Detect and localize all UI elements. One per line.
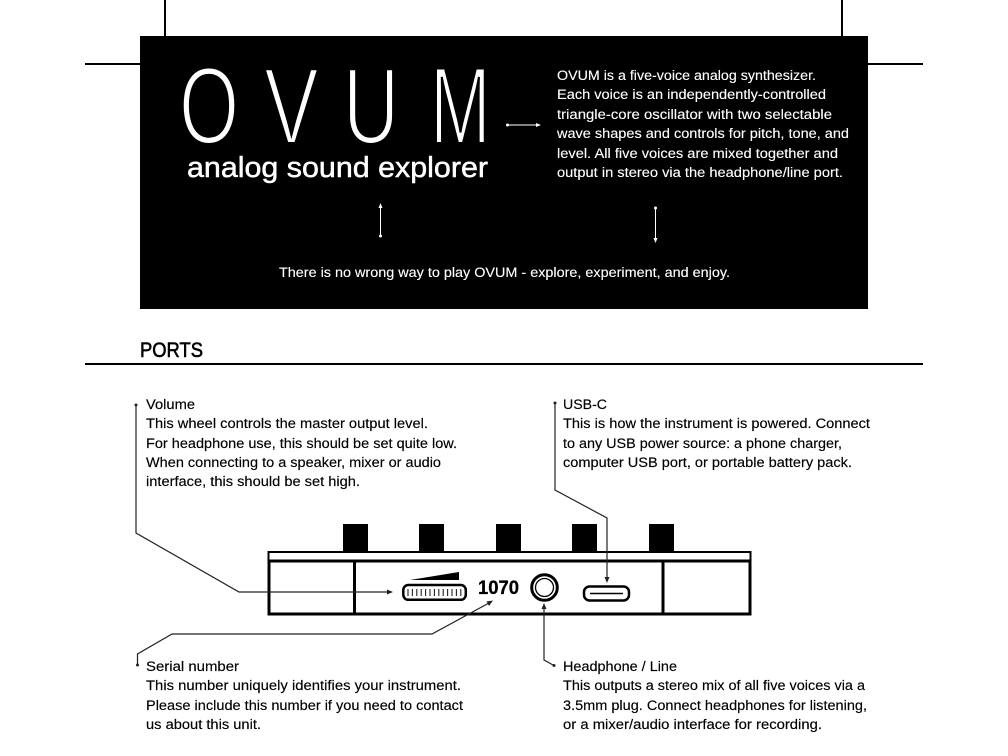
subtitle: analog sound explorer <box>187 152 488 184</box>
panel: intro <box>140 36 868 309</box>
text block: headphone / line <box>563 659 867 732</box>
title: OVUM: O <box>179 45 239 168</box>
text block: headphone / line: or a mixer/audio interface for recording. <box>563 717 822 732</box>
title: OVUM: M <box>430 45 491 167</box>
description text: OVUM is a five-voice analog synthesizer. <box>557 68 816 83</box>
description text: Each voice is an independently-controlled <box>557 87 826 102</box>
arrow: right vertical <box>654 206 658 243</box>
heading: ports: PORTS <box>140 339 203 362</box>
description text: triangle-core oscillator with two selectable <box>557 107 832 122</box>
device body <box>268 552 750 614</box>
text block: usb-c: USB-C <box>563 397 607 412</box>
text block: serial number: Serial number <box>146 659 240 674</box>
text block: headphone / line: 3.5mm plug. Connect headphones for listening, <box>563 698 867 713</box>
text block: volume: interface, this should be set high. <box>146 474 360 489</box>
description text: output in stereo via the headphone/line port. <box>557 165 843 180</box>
text block: headphone / line: Headphone / Line <box>563 659 677 674</box>
text block: volume: This wheel controls the master output level. <box>146 416 428 431</box>
text block: volume: For headphone use, this should be set quite low. <box>146 436 457 451</box>
knobs <box>343 524 674 552</box>
device diagram <box>268 524 750 614</box>
description text: level. All five voices are mixed together and <box>557 146 838 161</box>
title: OVUM <box>179 45 491 168</box>
closing line: There is no wrong way to play OVUM - explore, experiment, and enjoy. <box>279 265 730 280</box>
arrow: serial number <box>136 600 493 666</box>
usb-c port <box>584 586 629 600</box>
arrow: volume <box>134 404 393 594</box>
text block: headphone / line: This outputs a stereo mix of all five voices via a <box>563 678 866 693</box>
text block: serial number: Please include this number if you need to contact <box>146 698 463 713</box>
headphone jack <box>532 575 557 600</box>
text block: usb-c <box>563 397 870 470</box>
text block: serial number: us about this unit. <box>146 717 261 732</box>
arrow: usb-c <box>554 402 610 583</box>
serial number: 1070 <box>478 577 519 599</box>
text block: volume <box>146 397 457 489</box>
arrow: headphone <box>542 603 556 667</box>
title: OVUM: U <box>343 46 399 168</box>
text block: serial number <box>146 659 463 732</box>
text block: usb-c: to any USB power source: a phone charger, <box>563 436 842 451</box>
text block: volume: When connecting to a speaker, mixer or audio <box>146 455 441 470</box>
text block: serial number: This number uniquely identifies your instrument. <box>146 678 461 693</box>
text block: usb-c: computer USB port, or portable battery pack. <box>563 455 852 470</box>
arrow: left vertical <box>378 203 382 238</box>
description text <box>556 68 849 180</box>
volume wheel <box>403 572 466 600</box>
title: OVUM: V <box>264 46 319 167</box>
text block: usb-c: This is how the instrument is powered. Connect <box>563 416 870 431</box>
text block: volume: Volume <box>146 397 195 412</box>
description text: wave shapes and controls for pitch, tone, and <box>556 126 849 141</box>
arrow: title to description <box>506 123 541 127</box>
